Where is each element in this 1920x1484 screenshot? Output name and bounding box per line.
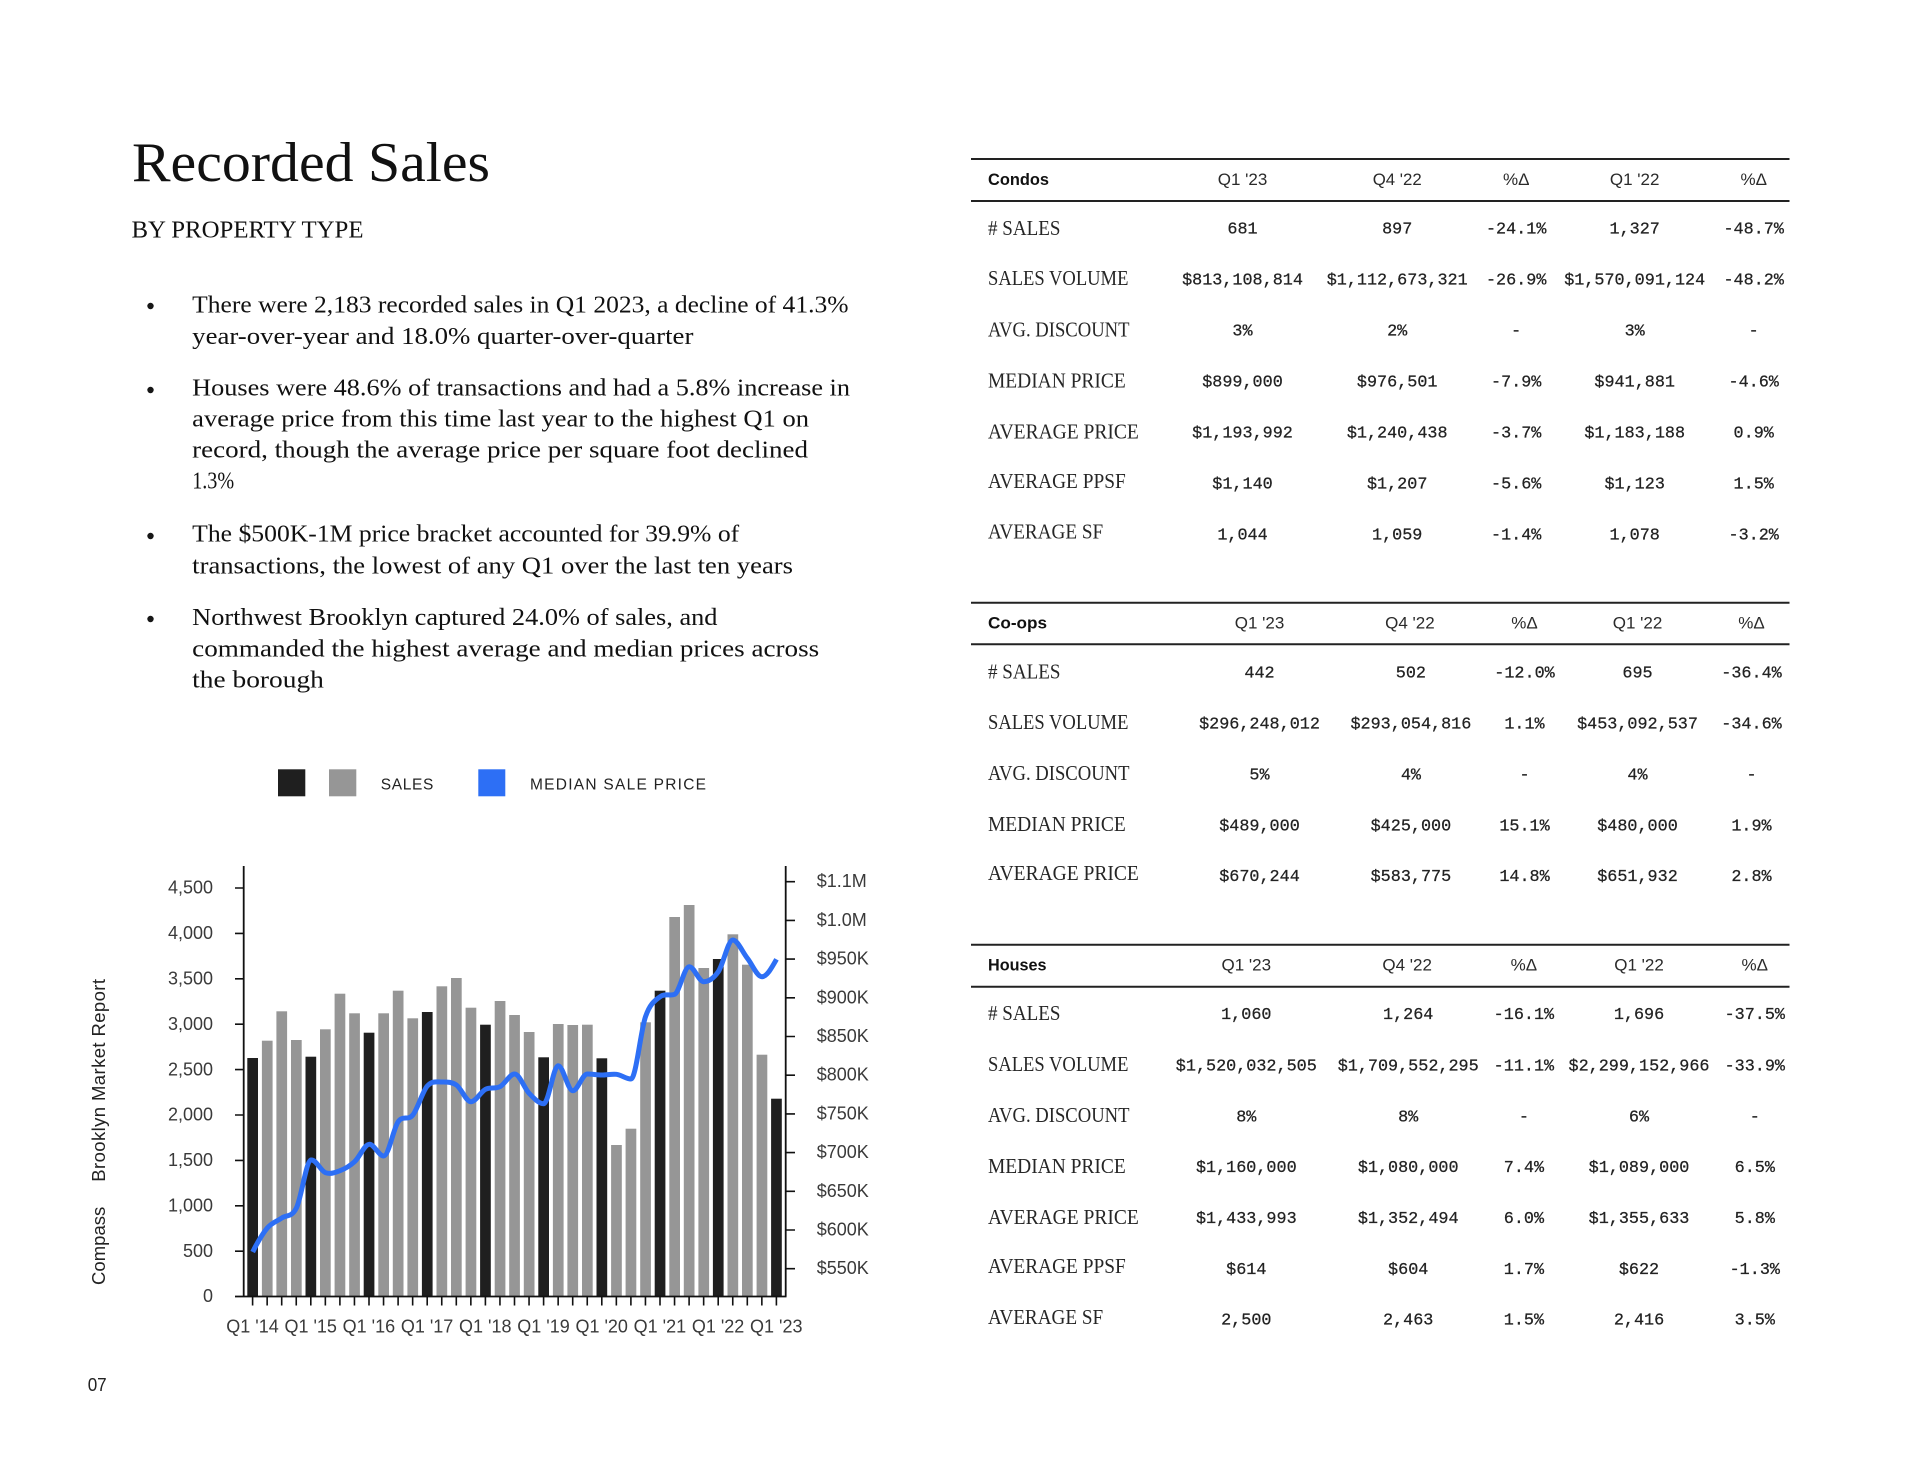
bullet 3: The $500K-1M price bracket accounted for 39.9% of <box>192 521 740 548</box>
header row: Q4 '22 <box>1385 613 1435 632</box>
row: average price: $1,193,992 <box>1192 425 1293 444</box>
row: median price: $1,160,000 <box>1196 1159 1297 1178</box>
row: median price: $941,881 <box>1594 374 1675 393</box>
row: avg discount: - <box>1519 766 1530 785</box>
row: average price <box>988 419 1775 444</box>
row: median price: 6.5% <box>1735 1159 1776 1178</box>
row: average sf: AVERAGE SF <box>988 519 1103 543</box>
row: average price: 0.9% <box>1734 425 1775 444</box>
header row: %Δ <box>1511 613 1538 632</box>
row: sales volume: $453,092,537 <box>1577 715 1698 734</box>
row: median price: $899,000 <box>1202 374 1283 393</box>
row: # sales: -12.0% <box>1494 664 1556 683</box>
row: average price <box>988 1205 1776 1229</box>
row: # sales: 897 <box>1382 221 1412 240</box>
gray sales bars <box>262 905 767 1296</box>
header row: Q1 '23 <box>1235 613 1284 632</box>
bullet 1: year-over-year and 18.0% quarter-over-quarter <box>192 323 693 350</box>
row: average price: $583,775 <box>1371 868 1451 887</box>
header row: Q1 '23 <box>1222 956 1271 975</box>
axes <box>235 866 786 1296</box>
row: average sf: 2,463 <box>1383 1312 1433 1331</box>
table rules <box>971 159 1790 201</box>
row: sales volume: -26.9% <box>1486 272 1547 291</box>
row: avg discount: 3% <box>1625 323 1646 342</box>
row: median price: $976,501 <box>1357 374 1437 393</box>
left axis labels: sales: 0 <box>203 1286 213 1306</box>
row: median price: -7.9% <box>1491 374 1542 393</box>
row: sales volume: $1,112,673,321 <box>1327 272 1468 291</box>
left axis labels: sales: 2,500 <box>168 1059 213 1079</box>
x axis labels: quarters: Q1 '20 <box>575 1317 628 1337</box>
row: sales volume: $296,248,012 <box>1199 715 1320 734</box>
side label: report name: Brooklyn Market Report <box>88 979 109 1182</box>
row: sales volume: $1,570,091,124 <box>1564 272 1705 291</box>
header row: Q1 '23 <box>1218 170 1267 189</box>
row: average ppsf: $622 <box>1619 1261 1659 1280</box>
row: average price: $1,183,188 <box>1584 425 1685 444</box>
row: sales volume: SALES VOLUME <box>988 1052 1128 1076</box>
row: median price: 15.1% <box>1499 817 1551 836</box>
row: sales volume: $2,299,152,966 <box>1568 1057 1710 1076</box>
row: avg discount: - <box>1511 323 1521 342</box>
row: sales volume: $293,054,816 <box>1350 715 1471 734</box>
row: avg discount: 6% <box>1629 1108 1650 1127</box>
row: # sales: -24.1% <box>1486 221 1547 240</box>
row: average ppsf: $614 <box>1226 1261 1266 1280</box>
left axis labels: sales: 3,000 <box>168 1014 213 1034</box>
row: average price: $1,352,494 <box>1358 1210 1459 1229</box>
row: average price: 6.0% <box>1504 1210 1545 1229</box>
row: average sf: 1,059 <box>1372 527 1422 546</box>
x axis labels: quarters: Q1 '16 <box>343 1317 395 1337</box>
left axis labels: sales: 3,500 <box>168 968 213 988</box>
header row: Q4 '22 <box>1382 956 1432 975</box>
row: average sf: -1.4% <box>1491 527 1542 546</box>
row: average price: 14.8% <box>1499 868 1551 887</box>
row: median price: $425,000 <box>1371 817 1451 836</box>
bullet 4: Northwest Brooklyn captured 24.0% of sales, and <box>192 604 717 631</box>
subtitle: BY PROPERTY TYPE <box>132 217 364 243</box>
row: average ppsf: 1.7% <box>1504 1261 1545 1280</box>
row: avg discount <box>988 761 1757 785</box>
chart: recorded sales bars and median sale price line <box>168 866 869 1337</box>
row: average price: AVERAGE PRICE <box>988 861 1139 885</box>
left axis labels: sales: 1,500 <box>168 1150 213 1170</box>
row: # sales: 1,264 <box>1383 1006 1433 1025</box>
table rules <box>971 603 1790 644</box>
row: # sales <box>988 1001 1786 1025</box>
right axis labels: median price: $800K <box>817 1065 869 1085</box>
row: avg discount: 2% <box>1387 323 1408 342</box>
row: average ppsf <box>988 1254 1781 1280</box>
black Q1 sales bars <box>247 959 782 1296</box>
x axis labels: quarters: Q1 '17 <box>401 1317 453 1337</box>
row: average ppsf <box>988 469 1775 495</box>
row: sales volume: $1,520,032,505 <box>1176 1057 1317 1076</box>
row: # sales: # SALES <box>988 1001 1060 1025</box>
header row <box>988 613 1765 632</box>
row: sales volume <box>988 710 1783 734</box>
row: avg discount: AVG. DISCOUNT <box>988 318 1130 342</box>
row: # sales: # SALES <box>988 659 1060 683</box>
header row <box>988 170 1767 189</box>
row: average ppsf: AVERAGE PPSF <box>988 1254 1126 1278</box>
bullet 2: 1.3% <box>192 468 234 495</box>
right axis labels: median price: $700K <box>817 1142 869 1162</box>
row: average price: 2.8% <box>1731 868 1773 887</box>
row: # sales: 695 <box>1622 664 1653 683</box>
row: median price: 7.4% <box>1504 1159 1545 1178</box>
row: sales volume: $1,709,552,295 <box>1338 1057 1479 1076</box>
axis ticks <box>235 882 795 1306</box>
row: avg discount: AVG. DISCOUNT <box>988 761 1130 785</box>
row: average sf: 3.5% <box>1735 1312 1776 1331</box>
row: # sales: 502 <box>1396 664 1426 683</box>
row: median price: 1.9% <box>1731 817 1773 836</box>
row: average price: $1,240,438 <box>1347 425 1448 444</box>
row: median price <box>988 1154 1776 1178</box>
row: avg discount: 4% <box>1627 766 1648 785</box>
row: avg discount: - <box>1746 766 1757 785</box>
row: median price: $1,089,000 <box>1589 1159 1689 1178</box>
row: # sales: -37.5% <box>1725 1006 1786 1025</box>
bullet 2: record, though the average price per square foot declined <box>192 436 808 464</box>
header row: Q1 '22 <box>1613 613 1662 632</box>
header row: %Δ <box>1740 170 1767 189</box>
row: average price: $1,433,993 <box>1196 1210 1297 1229</box>
row: median price <box>988 812 1773 836</box>
bullet 4: commanded the highest average and median prices across <box>192 636 819 663</box>
row: average sf: 2,416 <box>1614 1312 1664 1331</box>
panel: houses table <box>971 945 1790 1331</box>
row: median price: $489,000 <box>1219 817 1300 836</box>
row: average ppsf: $604 <box>1388 1261 1428 1280</box>
row: sales volume <box>988 1052 1786 1076</box>
row: average price: $651,932 <box>1597 868 1678 887</box>
row: average ppsf: AVERAGE PPSF <box>988 469 1126 493</box>
right axis labels: median price: $600K <box>817 1220 869 1240</box>
right axis labels: median price: $900K <box>817 987 869 1007</box>
header row: Condos <box>988 170 1049 189</box>
left axis labels: sales: 500 <box>183 1241 213 1261</box>
bullet 2: average price from this time last year to the highest Q1 on <box>192 406 809 433</box>
row: median price: $1,080,000 <box>1358 1159 1459 1178</box>
row: sales volume: SALES VOLUME <box>988 266 1128 290</box>
row: # sales: 1,327 <box>1610 221 1660 240</box>
row: sales volume: -33.9% <box>1725 1057 1786 1076</box>
header row: Q4 '22 <box>1373 170 1422 189</box>
header row: %Δ <box>1511 956 1537 975</box>
row: sales volume: 1.1% <box>1504 715 1546 734</box>
x axis labels: quarters: Q1 '22 <box>692 1317 744 1337</box>
right axis labels: median price: $650K <box>817 1181 869 1201</box>
row: average sf: AVERAGE SF <box>988 1305 1103 1329</box>
row: median price: $480,000 <box>1597 817 1678 836</box>
side label: report name: Compass <box>88 1207 109 1285</box>
text block: key findings bullets <box>147 292 850 694</box>
row: # sales <box>988 216 1785 240</box>
row: average sf: 2,500 <box>1221 1312 1271 1331</box>
row: average price <box>988 861 1773 887</box>
row: sales volume: SALES VOLUME <box>988 710 1128 734</box>
row: average sf: -3.2% <box>1729 527 1780 546</box>
median sale price line <box>253 940 776 1252</box>
left axis labels: sales: 1,000 <box>168 1196 213 1216</box>
title: Recorded Sales <box>132 132 490 194</box>
bullet 4 <box>147 604 819 694</box>
chart legend: SALES <box>381 776 433 793</box>
right axis labels: median price: $1.0M <box>817 910 867 930</box>
left axis labels: sales <box>168 878 213 1306</box>
bullet 2 <box>147 374 850 495</box>
row: average price: 5.8% <box>1735 1210 1776 1229</box>
bullet 3: transactions, the lowest of any Q1 over the last ten years <box>192 552 793 579</box>
header row: %Δ <box>1738 613 1765 632</box>
row: average price: $1,355,633 <box>1589 1210 1689 1229</box>
header row: Houses <box>988 956 1046 975</box>
row: sales volume: -34.6% <box>1721 715 1783 734</box>
right axis labels: median price: $1.1M <box>817 871 867 891</box>
row: average ppsf: $1,140 <box>1212 476 1273 495</box>
row: median price: MEDIAN PRICE <box>988 369 1126 393</box>
bullet 1 <box>147 292 848 350</box>
row: sales volume <box>988 266 1785 291</box>
chart legend <box>278 769 706 796</box>
x axis labels: quarters: Q1 '15 <box>284 1317 337 1337</box>
right axis labels: median price: $750K <box>817 1103 869 1123</box>
row: avg discount: 4% <box>1401 766 1422 785</box>
row: average sf: 1,044 <box>1217 527 1268 546</box>
row: sales volume: $813,108,814 <box>1182 272 1303 291</box>
x axis labels: quarters: Q1 '18 <box>459 1317 512 1337</box>
row: # sales: -16.1% <box>1494 1006 1555 1025</box>
table rules <box>971 945 1790 987</box>
header row: Q1 '22 <box>1610 170 1659 189</box>
header row: %Δ <box>1742 956 1768 975</box>
row: avg discount <box>988 1103 1760 1127</box>
right axis labels: median price: $850K <box>817 1026 869 1046</box>
panel: condos table <box>971 159 1790 546</box>
row: average price: AVERAGE PRICE <box>988 1205 1139 1229</box>
row: average ppsf: -1.3% <box>1730 1261 1781 1280</box>
row: median price: MEDIAN PRICE <box>988 1154 1126 1178</box>
row: avg discount: - <box>1749 323 1759 342</box>
left axis labels: sales: 4,000 <box>168 923 213 943</box>
bullet 4: the borough <box>192 667 324 694</box>
row: avg discount: - <box>1750 1108 1760 1127</box>
row: average sf <box>988 519 1780 546</box>
row: average price: -3.7% <box>1491 425 1542 444</box>
header row <box>988 956 1768 975</box>
row: median price <box>988 369 1780 393</box>
row: average price: AVERAGE PRICE <box>988 419 1139 443</box>
header row: Co-ops <box>988 613 1047 632</box>
header row: %Δ <box>1503 170 1529 189</box>
x axis labels: quarters: Q1 '14 <box>226 1317 279 1337</box>
row: # sales: 442 <box>1244 664 1275 683</box>
bullet 2: Houses were 48.6% of transactions and had a 5.8% increase in <box>192 374 850 401</box>
row: avg discount: 8% <box>1236 1108 1257 1127</box>
row: avg discount: 8% <box>1398 1108 1419 1127</box>
row: median price: MEDIAN PRICE <box>988 812 1126 836</box>
row: avg discount: 3% <box>1232 323 1253 342</box>
row: # sales: 1,060 <box>1221 1006 1271 1025</box>
bullet 3 <box>147 521 793 579</box>
right axis labels: median price <box>817 871 869 1278</box>
row: # sales <box>988 659 1783 683</box>
left axis labels: sales: 2,000 <box>168 1105 213 1125</box>
row: # sales: -48.7% <box>1723 221 1785 240</box>
x axis labels: quarters: Q1 '21 <box>634 1317 686 1337</box>
x axis labels: quarters <box>226 1317 803 1337</box>
left axis labels: sales: 4,500 <box>168 878 213 898</box>
chart legend: MEDIAN SALE PRICE <box>530 776 706 793</box>
header row: Q1 '22 <box>1614 956 1664 975</box>
side label: report name <box>88 979 109 1285</box>
row: average ppsf: -5.6% <box>1491 476 1542 495</box>
row: # sales: -36.4% <box>1721 664 1783 683</box>
row: avg discount <box>988 318 1759 342</box>
row: sales volume: -11.1% <box>1494 1057 1555 1076</box>
row: average price: $670,244 <box>1219 868 1300 887</box>
x axis labels: quarters: Q1 '23 <box>750 1317 803 1337</box>
row: # sales: # SALES <box>988 216 1060 240</box>
row: average sf <box>988 1305 1776 1331</box>
row: average sf: 1.5% <box>1504 1312 1545 1331</box>
row: average ppsf: 1.5% <box>1734 476 1775 495</box>
row: average ppsf: $1,207 <box>1367 476 1427 495</box>
bullet 1: There were 2,183 recorded sales in Q1 2023, a decline of 41.3% <box>192 292 848 319</box>
row: median price: -4.6% <box>1729 374 1780 393</box>
x axis labels: quarters: Q1 '19 <box>517 1317 570 1337</box>
row: avg discount: 5% <box>1249 766 1270 785</box>
row: avg discount: - <box>1519 1108 1529 1127</box>
panel: co-ops table <box>971 603 1790 887</box>
row: # sales: 681 <box>1227 221 1258 240</box>
row: # sales: 1,696 <box>1614 1006 1664 1025</box>
page number: 07 <box>88 1375 107 1395</box>
row: average ppsf: $1,123 <box>1604 476 1665 495</box>
row: sales volume: -48.2% <box>1723 272 1785 291</box>
row: avg discount: AVG. DISCOUNT <box>988 1103 1130 1127</box>
row: average sf: 1,078 <box>1610 527 1660 546</box>
right axis labels: median price: $950K <box>817 949 869 969</box>
right axis labels: median price: $550K <box>817 1258 869 1278</box>
